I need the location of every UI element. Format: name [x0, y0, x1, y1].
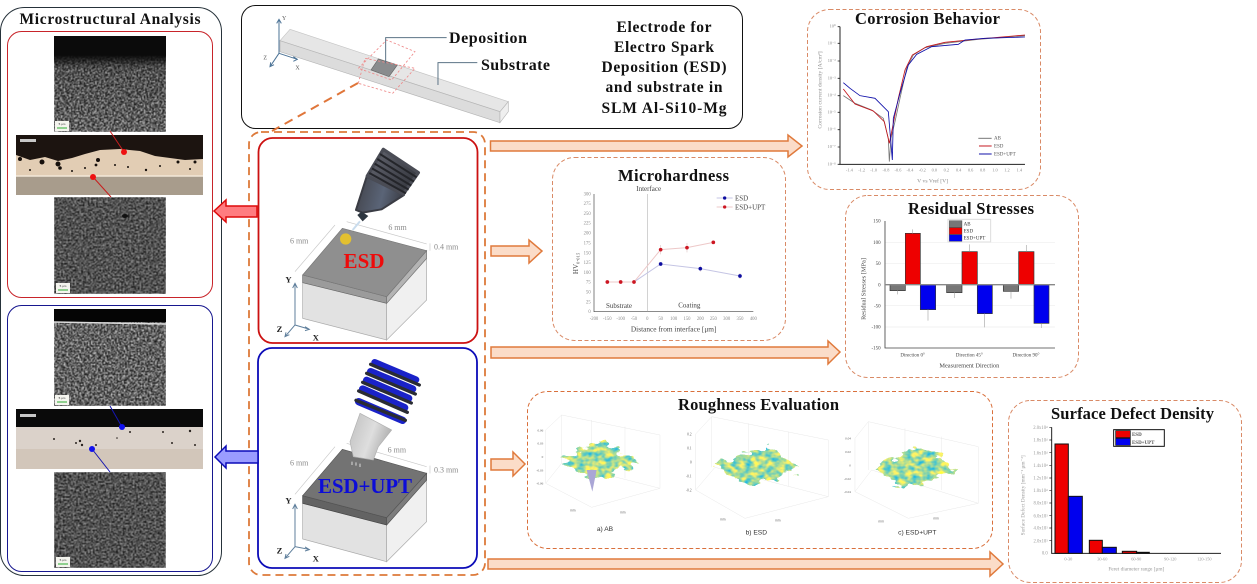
chart: defect density bars: 0.0: [1042, 552, 1048, 557]
chart: polarization curves: 10⁻⁸: [828, 161, 836, 166]
heading: microstructural analysis: Microstructural Analysis: [20, 11, 200, 28]
panel: roughness evaluation: [528, 392, 992, 548]
chart: defect density bars: 90-120: [1164, 557, 1176, 562]
chart: surface c) ESD+UPT: mm: [933, 516, 939, 520]
arrow: to microhardness: [491, 240, 542, 263]
chart: residual stress bars: 0: [878, 283, 881, 288]
chart: defect density bars: Feret diameter range [μm]: [1108, 567, 1165, 573]
micrograph: ESD coating top: 5 µm: [59, 122, 66, 126]
chart: residual stress bars: [860, 219, 1055, 369]
chart: defect density bars: 1.4x10⁴: [1033, 463, 1048, 469]
chart: residual stress bars: -150: [872, 347, 881, 352]
chart: residual stress bars: 150: [873, 220, 881, 225]
chart: polarization curves: 10⁻²: [828, 58, 836, 63]
label: substrate: Substrate: [481, 57, 550, 74]
micrograph: ESD+UPT coating top: [54, 309, 166, 406]
chart: microhardness vs distance: -150: [603, 317, 612, 322]
chart: defect density bars: 30-60: [1097, 557, 1107, 562]
panel: ESD process: [258, 138, 478, 343]
chart: microhardness vs distance: Distance from interface [μm]: [631, 324, 716, 333]
diagram: substrate beam with deposition: Z: [263, 55, 267, 61]
sub-panel: ESD micrographs: [8, 32, 212, 298]
chart: microhardness vs distance: 75: [586, 281, 591, 286]
chart: microhardness vs distance: 350: [736, 317, 744, 322]
chart: surface c) ESD+UPT: 0.04: [845, 437, 851, 441]
micrograph: ESD+UPT coating top: 5 µm: [59, 396, 66, 400]
text block: electrode description: and substrate in: [606, 79, 723, 96]
text block: electrode description: Electrode for: [616, 19, 712, 36]
chart: residual stress bars: Direction 90°: [1012, 354, 1040, 359]
micrograph: ESD substrate: [54, 197, 166, 294]
label: deposition: Deposition: [449, 30, 527, 47]
chart: microhardness vs distance: ESD: [735, 194, 748, 202]
chart: microhardness vs distance: -100: [616, 317, 626, 322]
chart: residual stress bars: AB: [964, 223, 971, 228]
icon: UPT tool: [350, 362, 419, 467]
arrow: to roughness evaluation: [491, 452, 525, 476]
panel: residual stresses: [846, 196, 1078, 378]
chart: residual stress bars: 50: [876, 262, 881, 267]
chart: microhardness vs distance: 250: [584, 212, 591, 217]
chart: polarization curves: -0.8: [883, 168, 889, 173]
chart: microhardness vs distance: HV₀.₀₁₅: [572, 252, 580, 274]
micrograph: ESD+UPT substrate: 5 µm: [60, 558, 67, 562]
micrograph: ESD+UPT optical cross-section: [16, 409, 203, 469]
heading: residual stresses: Residual Stresses: [908, 199, 1035, 218]
chart: residual stress bars: ESD+UPT: [964, 237, 985, 242]
chart: polarization curves: -0.2: [919, 168, 926, 173]
chart: polarization curves: [818, 24, 1025, 185]
heading: corrosion behavior: Corrosion Behavior: [855, 9, 1000, 28]
chart: microhardness vs distance: 200: [697, 317, 704, 322]
chart: microhardness vs distance: 225: [584, 222, 591, 227]
chart: surface a) AB: [536, 415, 660, 533]
chart: polarization curves: 1.2: [1004, 168, 1010, 173]
diagram: ESD block and electrode: X: [313, 333, 320, 343]
callout markers: ESD+UPT: [89, 406, 125, 472]
chart: microhardness vs distance: 50: [658, 317, 664, 322]
chart: polarization curves: V vs Vref [V]: [917, 178, 948, 185]
text block: electrode description: Electro Spark: [614, 39, 714, 56]
chart: surface a) AB: a) AB: [597, 526, 614, 533]
chart: polarization curves: 10⁻⁷: [828, 144, 836, 149]
chart: surface c) ESD+UPT: 0: [849, 464, 851, 468]
chart: defect density bars: 60-90: [1131, 557, 1141, 562]
label: ESD: ESD: [344, 249, 384, 273]
panel: microstructural analysis: [0, 8, 222, 576]
chart: microhardness vs distance: 0: [646, 317, 649, 322]
chart: surface c) ESD+UPT: [844, 422, 978, 536]
chart: microhardness vs distance: 100: [670, 317, 678, 322]
chart: residual stress bars: Direction 0°: [900, 354, 925, 359]
panel: surface defect density: [1008, 400, 1242, 582]
diagram: ESD+UPT block and tool: 6 mm: [388, 445, 407, 454]
panel: corrosion behavior: [808, 9, 1040, 190]
chart: surface b) ESD: b) ESD: [746, 529, 767, 536]
chart: polarization curves: -0.4: [907, 168, 914, 173]
chart: residual stress bars: -100: [872, 326, 881, 331]
diagram: ESD+UPT block and tool: 6 mm: [290, 459, 309, 468]
chart: polarization curves: ESD+UPT: [994, 153, 1016, 158]
diagram: substrate beam with deposition: X: [295, 65, 300, 71]
chart: surface b) ESD: 0.2: [687, 433, 692, 437]
panel: process dashed frame: [249, 132, 485, 575]
chart: defect density bars: 6.0x10³: [1033, 513, 1048, 519]
chart: defect density bars: ESD+UPT: [1132, 441, 1155, 446]
chart: surface a) AB: 0: [542, 455, 544, 459]
chart: polarization curves: 0.6: [968, 168, 974, 173]
chart: microhardness vs distance: -200: [590, 317, 599, 322]
chart: polarization curves: 10⁻¹: [828, 40, 836, 45]
chart: polarization curves: 0.4: [956, 168, 962, 173]
diagram: ESD+UPT block and tool: 0.3 mm: [434, 465, 459, 474]
chart: surface b) ESD: mm: [775, 518, 781, 522]
chart: surface a) AB: 0.06: [538, 428, 544, 432]
panel: microhardness: [552, 158, 786, 340]
chart: surface a) AB: mm: [620, 510, 626, 514]
chart: microhardness vs distance: Coating: [678, 301, 701, 309]
chart: microhardness vs distance: 50: [586, 291, 591, 296]
text block: electrode description: Deposition (ESD): [602, 59, 726, 76]
chart: residual stress bars: 100: [873, 241, 881, 246]
chart: polarization curves: 10⁻³: [828, 75, 836, 80]
dashed connector from deposition to process box: [272, 83, 358, 131]
chart: microhardness vs distance: ESD+UPT: [735, 203, 766, 211]
chart: defect density bars: [1019, 425, 1221, 573]
chart: polarization curves: 10⁻⁴: [828, 93, 836, 98]
chart: surface b) ESD: [686, 417, 828, 536]
chart: surface a) AB: -0.03: [536, 468, 544, 472]
chart: surface b) ESD: 0: [690, 460, 692, 464]
chart: polarization curves: 10⁻⁵: [828, 109, 836, 114]
chart: polarization curves: 1.0: [992, 168, 998, 173]
panel: ESD+UPT process: [258, 348, 477, 568]
sub-panel: ESD+UPT micrographs: [8, 306, 212, 572]
chart: residual stress bars: -50: [874, 304, 881, 309]
chart: surface c) ESD+UPT: mm: [878, 520, 884, 524]
chart: microhardness vs distance: 125: [584, 261, 591, 266]
heading: surface defect density: Surface Defect Density: [1051, 404, 1215, 423]
chart: microhardness vs distance: 250: [710, 317, 717, 322]
chart: surface a) AB: -0.06: [536, 482, 544, 486]
chart: defect density bars: 2.0x10⁴: [1033, 425, 1048, 431]
chart: microhardness vs distance: 275: [584, 202, 591, 207]
chart: defect density bars: ESD: [1132, 433, 1142, 438]
chart: polarization curves: -1.4: [846, 168, 854, 173]
chart: microhardness vs distance: -50: [631, 317, 638, 322]
chart: defect density bars: 2.0x10³: [1033, 538, 1048, 544]
diagram: ESD block and electrode: [277, 149, 459, 343]
chart: defect density bars: 8.0x10³: [1033, 501, 1048, 507]
chart: defect density bars: 1.2x10⁴: [1033, 476, 1048, 482]
chart: surface c) ESD+UPT: c) ESD+UPT: [898, 529, 936, 536]
chart: microhardness vs distance: 150: [683, 317, 691, 322]
diagram: ESD block and electrode: 6 mm: [388, 223, 408, 232]
label: ESD+UPT: ESD+UPT: [318, 474, 412, 498]
diagram: substrate beam with deposition: [263, 16, 508, 123]
arrow: to corrosion behavior: [490, 135, 802, 157]
chart: polarization curves: -1.2: [858, 168, 865, 173]
chart: surface b) ESD: 0.1: [687, 447, 692, 451]
diagram: ESD+UPT block and tool: Y: [285, 496, 292, 506]
chart: residual stress bars: Residual Stresses [MPa]: [860, 258, 867, 320]
arrow: to surface defect density: [488, 552, 1003, 576]
chart: microhardness vs distance: 100: [584, 271, 591, 276]
icon: ESD electrode: [353, 149, 418, 230]
chart: microhardness vs distance: 175: [584, 241, 591, 246]
chart: residual stress bars: Direction 45°: [956, 354, 983, 359]
chart: polarization curves: 10⁻⁶: [828, 127, 836, 132]
chart: defect density bars: 1.8x10⁴: [1033, 438, 1048, 444]
chart: microhardness vs distance: [572, 185, 766, 333]
diagram: ESD+UPT block and tool: X: [313, 554, 320, 564]
chart: surface c) ESD+UPT: -0.04: [844, 490, 851, 494]
chart: microhardness vs distance: 300: [723, 317, 731, 322]
chart: residual stress bars: ESD: [964, 230, 973, 235]
micrograph: ESD substrate: 5 µm: [60, 284, 67, 288]
chart: microhardness vs distance: 300: [584, 192, 591, 197]
chart: polarization curves: -1.0: [870, 168, 877, 173]
heading: roughness evaluation: Roughness Evaluation: [678, 395, 839, 414]
arrow: ESD+UPT to micrographs: [215, 446, 258, 468]
chart: microhardness vs distance: 25: [586, 300, 591, 305]
chart: defect density bars: 1.6x10⁴: [1033, 450, 1048, 456]
chart: polarization curves: AB: [994, 137, 1002, 142]
chart: microhardness vs distance: 0: [588, 310, 591, 315]
panel: electrode and substrate overview: [242, 6, 742, 128]
chart: surface a) AB: 0.03: [538, 442, 544, 446]
chart: microhardness vs distance: Interface: [636, 185, 661, 193]
chart: surface b) ESD: -0.2: [686, 488, 692, 492]
diagram: ESD block and electrode: Z: [277, 324, 283, 334]
chart: polarization curves: Corrosion current density [A/cm²]: [818, 51, 824, 129]
arrow: ESD to micrographs: [214, 200, 257, 222]
micrograph: ESD+UPT substrate: [54, 472, 166, 568]
chart: surface b) ESD: -0.1: [686, 475, 692, 479]
chart: polarization curves: -0.6: [895, 168, 902, 173]
chart: defect density bars: Surface Defect Density [mm⁻¹ μm⁻²]: [1019, 455, 1026, 535]
chart: polarization curves: 10⁰: [830, 24, 836, 29]
diagram: ESD block and electrode: 0.4 mm: [434, 243, 459, 252]
chart: surface b) ESD: mm: [720, 518, 726, 522]
micrograph: ESD coating top: [54, 36, 166, 132]
chart: microhardness vs distance: 150: [584, 251, 591, 256]
callout markers: ESD: [90, 131, 127, 197]
chart: surface c) ESD+UPT: 0.02: [845, 450, 851, 454]
chart: defect density bars: 1.0x10⁴: [1033, 488, 1048, 494]
chart: polarization curves: ESD: [994, 145, 1004, 150]
chart: microhardness vs distance: Substrate: [606, 302, 632, 310]
chart: defect density bars: 4.0x10³: [1033, 526, 1048, 532]
chart: residual stress bars: Measurement Direction: [939, 362, 1000, 369]
chart: polarization curves: 0.8: [980, 168, 985, 173]
diagram: ESD+UPT block and tool: Z: [277, 545, 283, 555]
diagram: ESD block and electrode: 6 mm: [290, 236, 309, 245]
text block: electrode description: SLM Al-Si10-Mg: [602, 100, 727, 117]
chart: defect density bars: 0-30: [1064, 557, 1072, 562]
chart: polarization curves: 0.2: [944, 168, 949, 173]
chart: surface c) ESD+UPT: -0.02: [844, 477, 851, 481]
heading: microhardness: Microhardness: [618, 166, 730, 185]
diagram: ESD block and electrode: Y: [285, 275, 292, 285]
chart: polarization curves: 0.0: [932, 168, 937, 173]
arrow: to residual stresses: [491, 341, 840, 364]
chart: microhardness vs distance: 400: [750, 317, 757, 322]
chart: surface a) AB: mm: [570, 509, 576, 513]
chart: defect density bars: 120-150: [1197, 557, 1212, 562]
chart: microhardness vs distance: 200: [584, 232, 591, 237]
diagram: substrate beam with deposition: Y: [282, 16, 287, 22]
chart: polarization curves: 1.4: [1017, 168, 1023, 173]
text block: electrode description: [602, 19, 727, 117]
micrograph: ESD optical cross-section: [16, 135, 203, 195]
diagram: ESD+UPT block and tool: [277, 362, 459, 564]
